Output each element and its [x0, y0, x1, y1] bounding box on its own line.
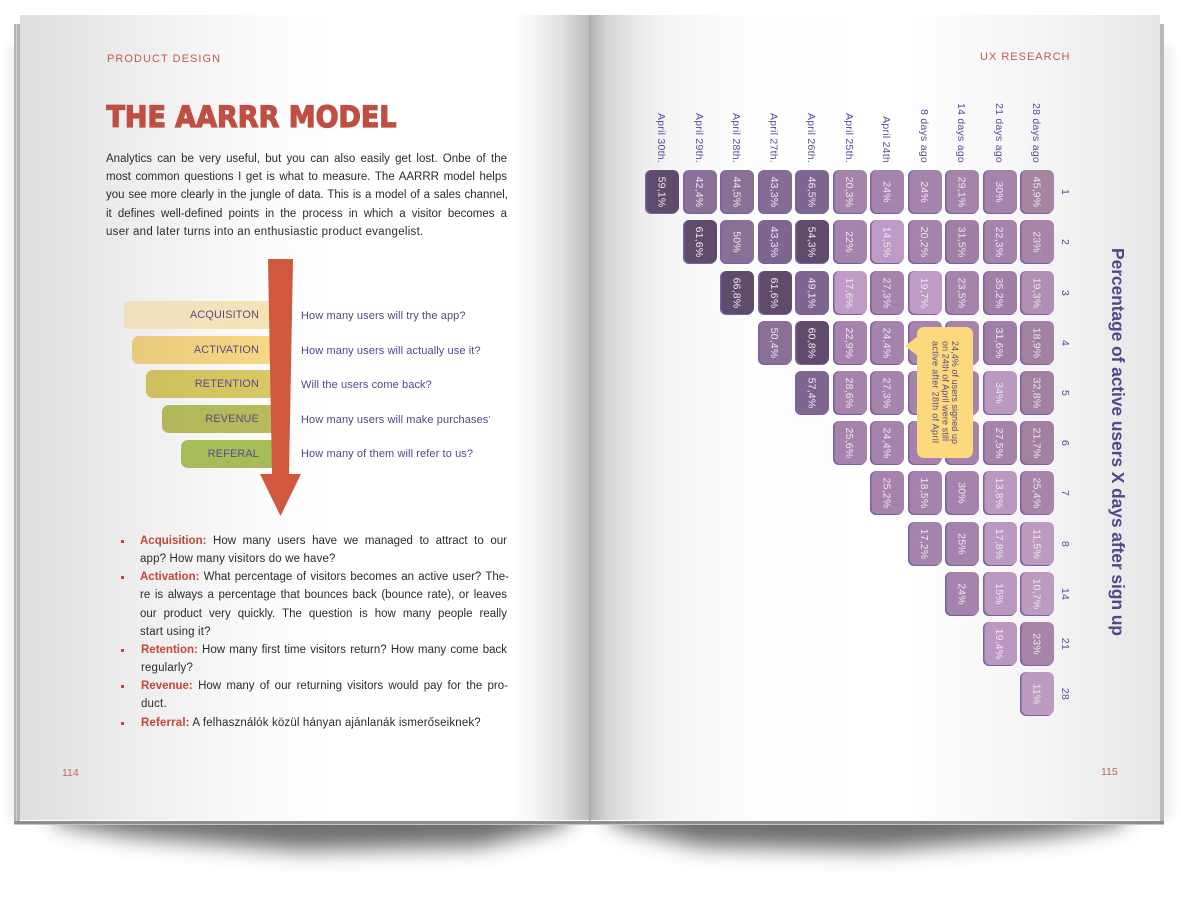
- row 6: 25,6%: [843, 428, 855, 458]
- question: acquisition: How many users will try the app?: [301, 310, 466, 322]
- intro paragraph: [106, 153, 508, 238]
- row 1: 59,1%: [656, 177, 668, 207]
- column headers: 28 days ago: [1030, 103, 1042, 163]
- column headers: April 27th.: [768, 113, 780, 163]
- row 2: 54,3%: [806, 227, 818, 257]
- intro paragraph: user and later turns into an enthusiastic product evangelist.: [106, 226, 424, 238]
- row 2: 50%: [730, 231, 742, 253]
- funnel bar: activation: ACTIVATION: [194, 344, 259, 356]
- column headers: April 30th.: [655, 113, 667, 163]
- intro paragraph: it defines well-defined points in the process in which a visitor becomes a: [106, 208, 507, 220]
- row 14: 24%: [956, 583, 968, 605]
- row 8: 11,5%: [1030, 529, 1042, 559]
- item: acquisition: [121, 535, 507, 565]
- intro paragraph: you see more clearly in the jungle of data. This is a model of a sales channel,: [106, 189, 508, 201]
- row 6: [832, 420, 1054, 466]
- row 1: 29,1%: [956, 177, 968, 207]
- callout: 24,4% of users signed up: [950, 341, 960, 444]
- row labels: 14: [1059, 588, 1071, 600]
- callout: [905, 327, 973, 458]
- row 4: 24,4%: [880, 328, 892, 358]
- funnel bar: referal: REFERAL: [208, 448, 259, 460]
- row 6: 27,5%: [993, 428, 1005, 458]
- row 5: 32,8%: [1030, 378, 1042, 408]
- row 1: 42,4%: [693, 177, 705, 207]
- row 7: [870, 470, 1054, 516]
- row 2: [682, 220, 1054, 264]
- row 5: 34%: [993, 382, 1005, 404]
- row 2: 61,6%: [693, 227, 705, 257]
- row 2: 22%: [843, 231, 855, 253]
- row 5: [794, 370, 1054, 416]
- page number 114: 114: [62, 767, 79, 779]
- header: product design: PRODUCT DESIGN: [107, 53, 221, 65]
- item: activation: Activation: What percentage of visitors becomes an active user? The-: [140, 571, 509, 583]
- row 6: 21,7%: [1030, 428, 1042, 458]
- row 5: 27,3%: [880, 378, 892, 408]
- row 7: 18,5%: [918, 478, 930, 508]
- row 2: 43,3%: [768, 227, 780, 257]
- item: revenue: Revenue: How many of our returning visitors would pay for the pro-: [141, 680, 508, 692]
- item: retention: [121, 644, 507, 674]
- column headers: [655, 103, 1042, 163]
- funnel bar: retention: RETENTION: [195, 378, 259, 390]
- row 8: 25%: [956, 533, 968, 555]
- row 7: 25,2%: [880, 478, 892, 508]
- row 1: 20,3%: [843, 177, 855, 207]
- row 4: 31,6%: [993, 328, 1005, 358]
- funnel bar: referal: [181, 440, 275, 468]
- row 7: 30%: [956, 482, 968, 504]
- funnel bar: revenue: [162, 405, 274, 433]
- row 3: 19,7%: [918, 278, 930, 308]
- row 21: 19,4%: [993, 629, 1005, 659]
- row 14: 10,7%: [1030, 579, 1042, 609]
- row 3: 23,5%: [956, 278, 968, 308]
- vertical chart title: Percentage of active users X days after sign up: [1108, 248, 1128, 636]
- row labels: 8: [1059, 541, 1071, 547]
- row 4: 18,9%: [1030, 328, 1042, 358]
- row labels: 4: [1059, 340, 1071, 346]
- row labels: 5: [1059, 390, 1071, 396]
- item: retention: regularly?: [141, 662, 193, 674]
- row 8: 17,8%: [993, 529, 1005, 559]
- row labels: 7: [1059, 490, 1071, 496]
- funnel bar: acquisition: [124, 301, 271, 329]
- column headers: April 28th.: [730, 113, 742, 163]
- row labels: 3: [1059, 290, 1071, 296]
- funnel bar: retention: [146, 370, 273, 398]
- row 7: 13,8%: [993, 478, 1005, 508]
- item: acquisition: app? How many visitors do we have?: [140, 553, 336, 565]
- row 21: [982, 622, 1054, 666]
- column headers: April 26th.: [805, 113, 817, 163]
- row 3: 66,8%: [730, 278, 742, 308]
- item: revenue: [121, 680, 508, 710]
- row 4: 22,9%: [843, 328, 855, 358]
- intro paragraph: most common questions I get is what to measure. The AARRR model helps: [106, 171, 507, 183]
- row 4: [758, 320, 1054, 366]
- item: activation: our product very quickly. The question is how many people really: [140, 608, 507, 620]
- row 2: 14,5%: [880, 227, 892, 257]
- row 28: 11%: [1030, 684, 1042, 704]
- page number 115: 115: [1101, 766, 1118, 778]
- header: ux research: UX RESEARCH: [980, 51, 1070, 63]
- arrow: funnel direction: [260, 259, 301, 516]
- row 1: 24%: [880, 181, 892, 203]
- row labels: [1059, 189, 1071, 700]
- question: retention: Will the users come back?: [301, 379, 432, 391]
- column headers: 21 days ago: [993, 103, 1005, 163]
- row 2: 31,5%: [956, 227, 968, 257]
- funnel diagram: [124, 259, 490, 516]
- row 2: 23%: [1030, 231, 1042, 253]
- funnel bar: revenue: REVENUE: [205, 413, 259, 425]
- question: activation: How many users will actually use it?: [301, 345, 481, 357]
- column headers: April 25th.: [843, 113, 855, 163]
- row 7: 25,4%: [1030, 478, 1042, 508]
- row 8: [908, 522, 1054, 566]
- row 3: 61,6%: [768, 278, 780, 308]
- row 5: 28,6%: [843, 378, 855, 408]
- row 1: 43,3%: [768, 177, 780, 207]
- row labels: 2: [1059, 239, 1071, 245]
- row 2: 22,3%: [993, 227, 1005, 257]
- row 1: 30%: [993, 181, 1005, 203]
- item: activation: re is always a percentage that bounces back (bounce rate), or leaves: [140, 589, 507, 601]
- item: acquisition: Acquisition: How many users have we managed to attract to our: [140, 535, 507, 547]
- row 3: 17,6%: [843, 278, 855, 308]
- row 3: 27,3%: [880, 278, 892, 308]
- row 3: 49,1%: [806, 278, 818, 308]
- row 28: [1020, 672, 1054, 716]
- bullet list: [121, 535, 509, 729]
- row labels: 1: [1059, 189, 1071, 195]
- column headers: 8 days ago: [918, 109, 930, 163]
- row 3: 35,2%: [993, 278, 1005, 308]
- callout: active after 28th of April: [930, 341, 940, 443]
- callout: on 24th of April were still: [940, 341, 950, 441]
- row 4: 60,8%: [806, 328, 818, 358]
- row labels: 6: [1059, 440, 1071, 446]
- question: revenue: How many users will make purchases?: [301, 414, 490, 426]
- row 3: [720, 270, 1054, 316]
- row labels: 28: [1059, 688, 1071, 700]
- row 5: 57,4%: [806, 378, 818, 408]
- row 4: 50,4%: [768, 328, 780, 358]
- row 2: 20,2%: [918, 227, 930, 257]
- column headers: April 29th.: [693, 113, 705, 163]
- row 14: 15%: [993, 583, 1005, 605]
- item: retention: Retention: How many first time visitors return? How many come back: [141, 644, 507, 656]
- row 1: 44,5%: [730, 177, 742, 207]
- row 6: 24,4%: [880, 428, 892, 458]
- item: revenue: duct.: [141, 698, 167, 710]
- item: activation: start using it?: [140, 626, 211, 638]
- column headers: 14 days ago: [955, 103, 967, 163]
- row 1: 45,9%: [1030, 177, 1042, 207]
- intro paragraph: Analytics can be very useful, but you can also easily get lost. Onbe of the: [106, 153, 507, 165]
- item: activation: [121, 571, 509, 638]
- row 1: 46,5%: [806, 177, 818, 207]
- question: referal: How many of them will refer to us?: [301, 448, 473, 460]
- item: referral: Referral: A felhasználók közül hányan ajánlanák ismerőseiknek?: [141, 717, 481, 729]
- row labels: 21: [1059, 638, 1071, 650]
- funnel bar: acquisition: ACQUISITON: [190, 309, 259, 321]
- row 14: [944, 572, 1054, 616]
- row 3: 19,3%: [1030, 278, 1042, 308]
- row 8: 17,2%: [918, 529, 930, 559]
- funnel bar: activation: [132, 336, 272, 364]
- column headers: April 24th: [880, 116, 892, 163]
- row 1: 24%: [918, 181, 930, 203]
- row 21: 23%: [1030, 633, 1042, 655]
- title: THE AARRR MODEL: [106, 100, 396, 134]
- row 1: [644, 170, 1054, 214]
